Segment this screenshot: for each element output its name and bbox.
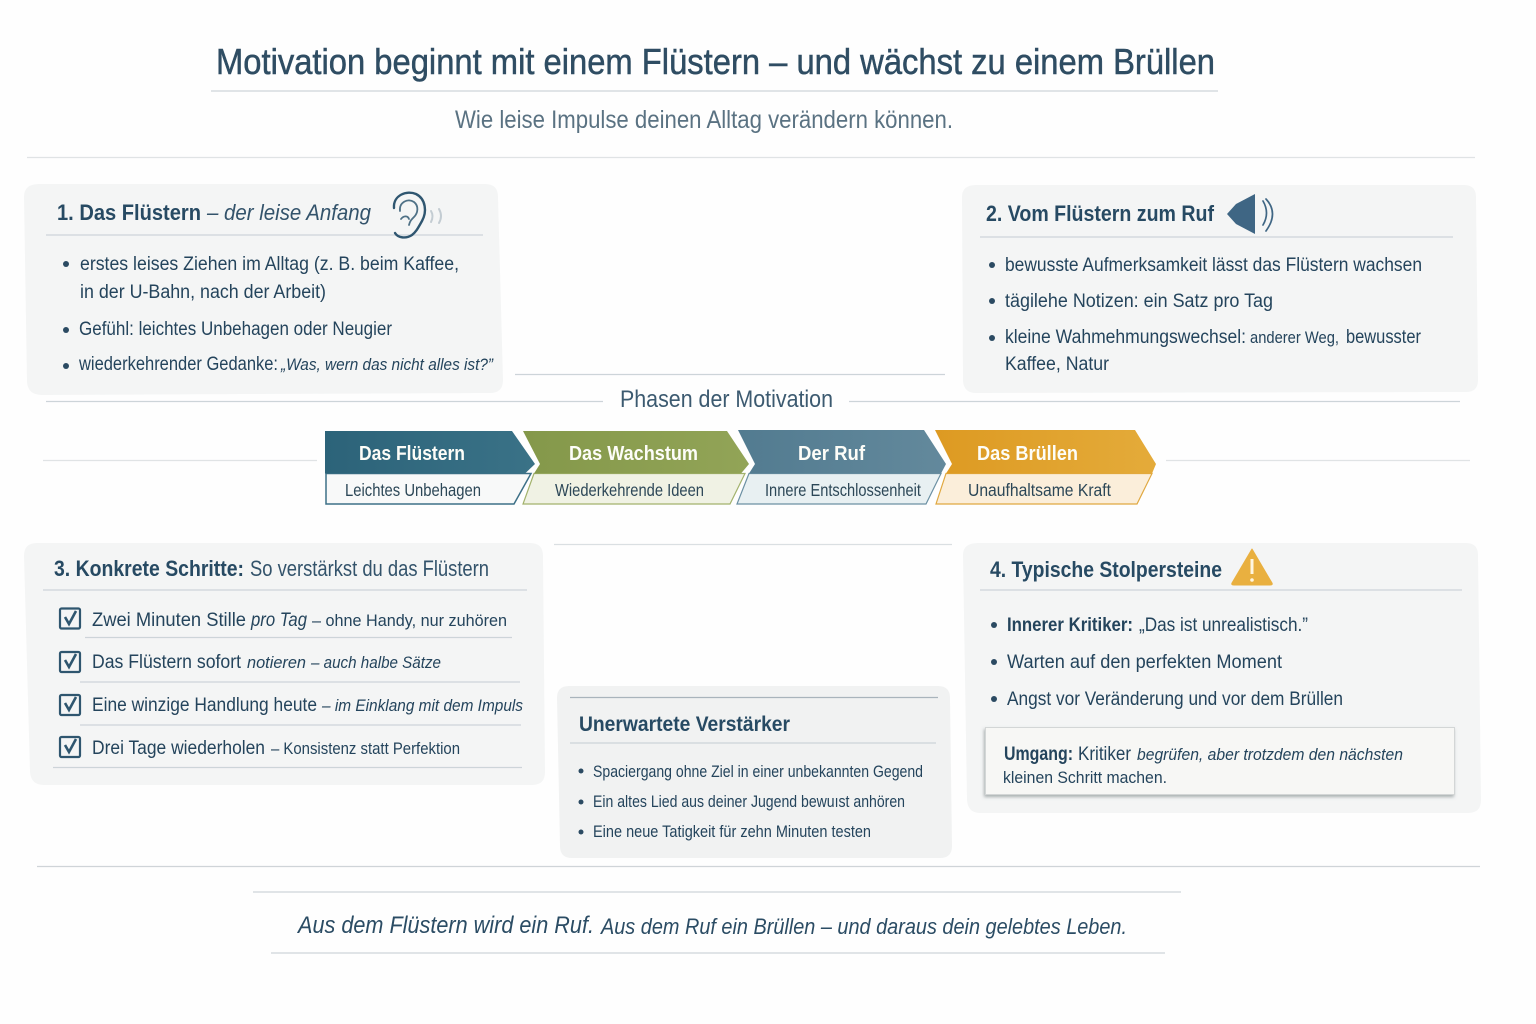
heading: Das Flüstern (46, 200, 483, 235)
icon: ear (394, 193, 441, 237)
checklist item 2: notieren (247, 653, 306, 672)
heading: Unerwartete Verstärker: Unerwartete Verstärker (579, 713, 790, 736)
bullet list: „Das ist unrealistisch.” (1139, 615, 1308, 636)
bullet list: Angst vor Veränderung und vor dem Brüllen (1007, 689, 1343, 710)
bullet list: anderer Weg, (1250, 328, 1339, 347)
panel: 2. Vom Flüstern zum Ruf (962, 185, 1478, 393)
icon: speaker (1227, 194, 1272, 234)
icon: warning triangle (1232, 549, 1272, 585)
bullet list: Warten auf den perfekten Moment (1007, 652, 1283, 673)
phase 4: Das Brüllen: Das Brüllen (977, 443, 1078, 465)
checklist item 4: – Konsistenz statt Perfektion (271, 739, 460, 758)
checklist item 4: Drei Tage wiederholen (92, 738, 265, 759)
bullet list: kleine Wahmehmungswechsel: (1005, 327, 1246, 348)
callout: Umgang: kleinen Schritt machen. (1003, 768, 1167, 787)
bullet list (578, 762, 923, 841)
bullet list: bewusste Aufmerksamkeit lässt das Flüstern wachsen (1005, 255, 1422, 276)
checklist item 3 (60, 695, 523, 725)
phase 2: Das Wachstum (523, 431, 749, 504)
heading: Konkrete Schritte: So verstärkst du das Flüstern (250, 556, 489, 581)
bullet list (63, 254, 494, 375)
bullet list: Gefühl: leichtes Unbehagen oder Neugier (79, 319, 393, 340)
checklist item 3: – im Einklang mit dem Impuls (321, 696, 523, 715)
panel: 1. Das Flüstern (24, 184, 503, 395)
phase 4: Das Brüllen (935, 430, 1156, 504)
bullet list: tägilehe Notizen: ein Satz pro Tag (1005, 291, 1273, 312)
checklist item 2 (60, 652, 520, 682)
bullet list: Eine neue Tatigkeit für zehn Minuten testen (593, 822, 871, 841)
bullet list: Innerer Kritiker: (1007, 615, 1133, 636)
panel: 3. Konkrete Schritte (24, 543, 545, 785)
bullet list (991, 615, 1343, 710)
bullet list: wiederkehrender Gedanke: (78, 354, 278, 375)
subtitle: Wie leise Impulse deinen Alltag verändern können. (455, 106, 953, 134)
callout: Umgang: Umgang: (1004, 744, 1073, 765)
callout: Umgang: begrüfen, aber trotzdem den nächsten (1137, 745, 1403, 764)
heading: Das Flüstern: 1. Das Flüstern (57, 200, 201, 225)
phase 1: Das Flüstern (325, 431, 535, 504)
bullet list: erstes leises Ziehen im Alltag (z. B. beim Kaffee, (80, 254, 459, 275)
phase 3: Der Ruf: Der Ruf (798, 443, 865, 465)
heading: Konkrete Schritte (43, 556, 527, 590)
heading: Konkrete Schritte: 3. Konkrete Schritte: (54, 556, 244, 581)
phase 3: Der Ruf: Innere Entschlossenheit (765, 480, 921, 500)
checklist item 1: pro Tag (250, 610, 307, 631)
heading: Das Flüstern: – der leise Anfang (206, 200, 372, 225)
panel: Unerwartete Verstärker (557, 686, 952, 858)
checklist item 1: – ohne Handy, nur zuhören (312, 611, 507, 630)
bullet list: „Was, wern das nicht alles ist?” (280, 355, 494, 374)
section heading: Phasen der Motivation: Phasen der Motivation (620, 386, 833, 413)
checklist item 3: Eine winzige Handlung heute (92, 695, 317, 716)
bullet list: in der U-Bahn, nach der Arbeit) (80, 282, 326, 303)
checklist item 2: – auch halbe Sätze (310, 653, 441, 672)
bullet list (989, 255, 1422, 375)
checklist item 2: Das Flüstern sofort (92, 652, 242, 673)
bullet list: Ein altes Lied aus deiner Jugend bewuıst anhören (593, 792, 905, 811)
phase 2: Das Wachstum: Wiederkehrende Ideen (555, 480, 704, 500)
phase 2: Das Wachstum: Das Wachstum (569, 443, 698, 465)
checklist item 1: Zwei Minuten Stille (92, 610, 246, 631)
heading: Typische Stolpersteine: 4. Typische Stolpersteine (990, 557, 1222, 582)
checklist item 1 (60, 608, 512, 638)
panel: 4. Typische Stolpersteine (963, 543, 1481, 813)
callout: Umgang: Kritiker (1078, 744, 1132, 765)
bullet list: Kaffee, Natur (1005, 354, 1110, 375)
heading: Vom Flüstern zum Ruf: 2. Vom Flüstern zum Ruf (986, 201, 1215, 226)
phase 1: Das Flüstern: Leichtes Unbehagen (345, 480, 481, 500)
phase 3: Der Ruf (737, 430, 946, 504)
callout: Umgang (986, 728, 1454, 794)
bullet list: bewusster (1346, 327, 1422, 348)
chevron process: phases (325, 430, 1156, 504)
phase 4: Das Brüllen: Unaufhaltsame Kraft (968, 480, 1111, 500)
checklist item 4 (53, 737, 522, 768)
closing statement: Aus dem Ruf ein Brüllen – und daraus dein gelebtes Leben. (599, 914, 1127, 939)
bullet list: Spaciergang ohne Ziel in einer unbekannten Gegend (593, 762, 923, 781)
closing statement (253, 892, 1181, 953)
closing statement: Aus dem Flüstern wird ein Ruf. (296, 912, 594, 939)
phase 1: Das Flüstern: Das Flüstern (359, 443, 465, 465)
title: Motivation beginnt mit einem Flüstern – und wächst zu einem Brüllen (216, 41, 1215, 82)
